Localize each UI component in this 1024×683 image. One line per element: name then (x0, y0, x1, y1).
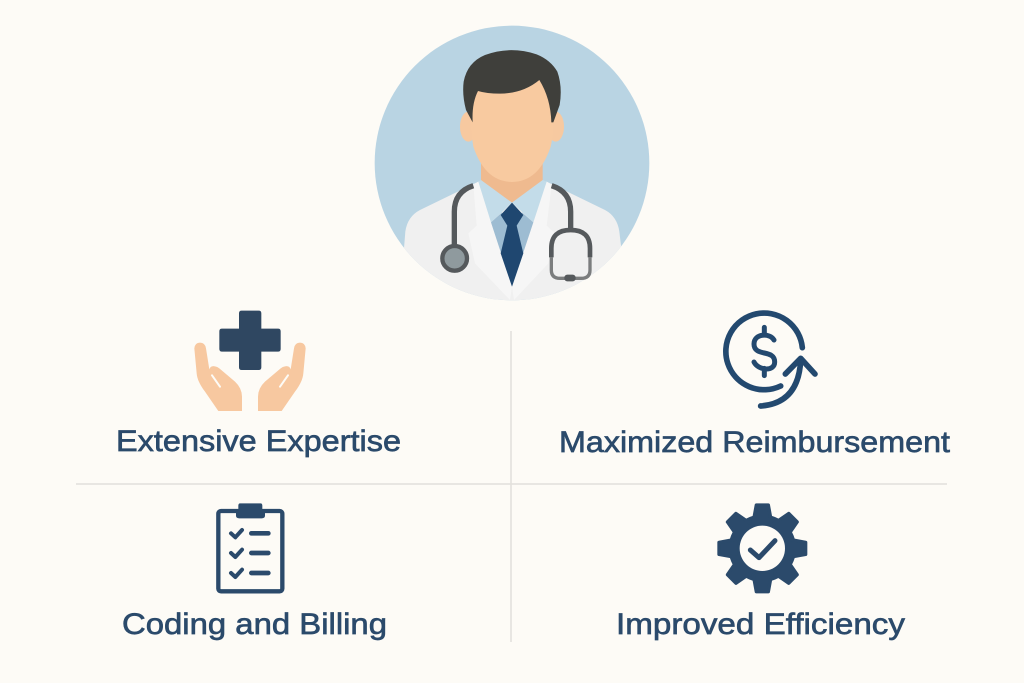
label: Maximized Reimbursement (559, 426, 951, 459)
icon: clipboard checklist (218, 503, 282, 591)
shirt collar (478, 180, 547, 222)
ears (460, 112, 477, 142)
stethoscope (442, 186, 590, 281)
label: Improved Efficiency (616, 608, 905, 641)
shirt (491, 212, 533, 287)
neck (481, 158, 543, 203)
block: maximized reimbursement (559, 313, 951, 459)
white coat (404, 182, 621, 305)
block: extensive expertise (116, 311, 401, 458)
hair (463, 50, 561, 122)
doctor portrait (375, 26, 649, 305)
block: coding and billing (122, 503, 387, 641)
label: Coding and Billing (122, 608, 387, 641)
icon: dollar with up arrow (726, 313, 815, 406)
background circle (375, 26, 649, 300)
icon: gear with check (719, 505, 806, 592)
icon: cross in caring hands (194, 311, 306, 411)
label: Extensive Expertise (116, 425, 401, 458)
face (471, 65, 553, 182)
block: improved efficiency (616, 505, 905, 641)
necktie (501, 203, 523, 287)
